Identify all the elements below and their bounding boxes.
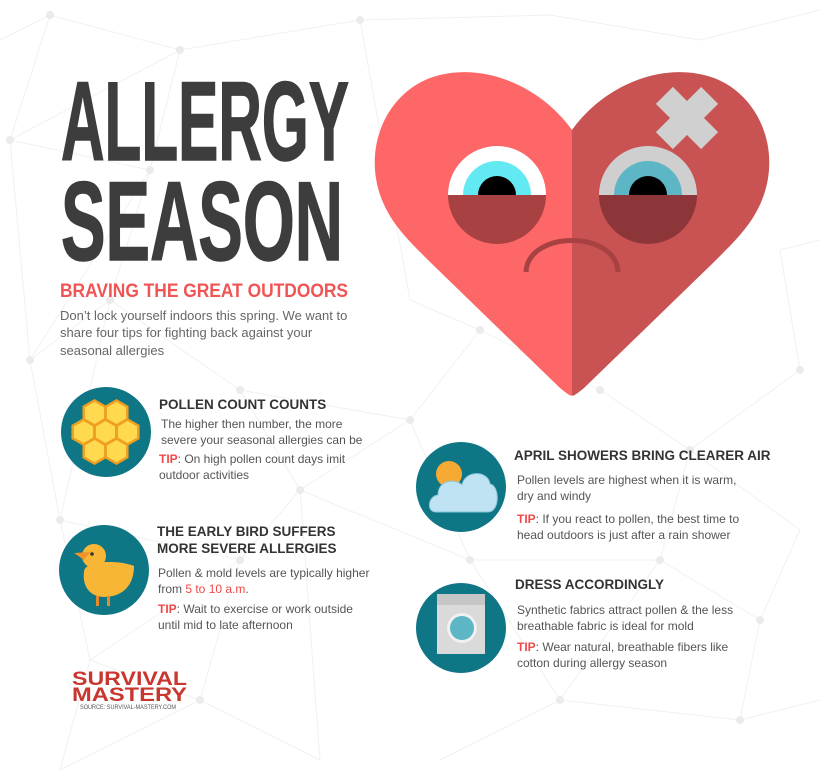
panel: early bird: until mid to late afternoon bbox=[158, 618, 293, 632]
panel: dress accordingly: DRESS ACCORDINGLY bbox=[515, 577, 664, 592]
icon: honeycomb bbox=[61, 387, 151, 477]
intro text: seasonal allergies bbox=[60, 343, 165, 358]
logo bbox=[72, 669, 187, 711]
panel: april showers: dry and windy bbox=[517, 489, 591, 503]
panel: pollen count: TIP: On high pollen count days imit bbox=[159, 452, 346, 466]
title bbox=[61, 59, 349, 284]
panel: pollen count: severe your seasonal allergies can be bbox=[161, 433, 363, 447]
panel: early bird: MORE SEVERE ALLERGIES bbox=[157, 541, 337, 556]
intro text bbox=[60, 308, 347, 358]
icon: washing machine bbox=[416, 583, 506, 673]
panel: early bird: THE EARLY BIRD SUFFERS bbox=[157, 524, 336, 539]
title: ALLERGY bbox=[61, 59, 349, 184]
left eye bbox=[448, 146, 546, 244]
panel: pollen count bbox=[159, 397, 363, 482]
panel: april showers: head outdoors is just after a rain shower bbox=[517, 528, 730, 542]
panel: pollen count: outdoor activities bbox=[159, 468, 249, 482]
panel: dress accordingly bbox=[515, 577, 733, 670]
panel: april showers: Pollen levels are highest when it is warm, bbox=[517, 473, 736, 487]
panel: dress accordingly: TIP: Wear natural, breathable fibers like bbox=[517, 640, 729, 654]
panel: dress accordingly: Synthetic fabrics attract pollen & the less bbox=[517, 603, 733, 617]
panel: early bird: TIP: Wait to exercise or work outside bbox=[158, 602, 353, 616]
logo: MASTERY bbox=[72, 685, 187, 706]
icon: duck bbox=[59, 525, 149, 615]
logo: SOURCE: SURVIVAL-MASTERY.COM bbox=[80, 705, 176, 711]
panel: april showers: TIP: If you react to pollen, the best time to bbox=[517, 512, 739, 526]
panel: early bird: from 5 to 10 a.m. bbox=[158, 582, 249, 596]
mouth bbox=[526, 240, 618, 272]
subtitle: BRAVING THE GREAT OUTDOORS bbox=[60, 281, 348, 302]
panel: april showers: APRIL SHOWERS BRING CLEARER AIR bbox=[514, 448, 771, 463]
panel: dress accordingly: cotton during allergy season bbox=[517, 656, 667, 670]
title: SEASON bbox=[61, 159, 343, 284]
panel: pollen count: The higher then number, the more bbox=[161, 417, 343, 431]
icon: cloud bbox=[416, 442, 506, 532]
intro text: share four tips for fighting back against your bbox=[60, 325, 313, 340]
bandage bbox=[656, 87, 718, 149]
right eye bbox=[599, 146, 697, 244]
panel: early bird: Pollen & mold levels are typically higher bbox=[158, 566, 369, 580]
panel: dress accordingly: breathable fabric is ideal for mold bbox=[517, 619, 694, 633]
heart bbox=[375, 72, 769, 396]
logo: SURVIVAL bbox=[72, 669, 187, 690]
intro text: Don’t lock yourself indoors this spring. We want to bbox=[60, 308, 347, 323]
panel: pollen count: POLLEN COUNT COUNTS bbox=[159, 397, 326, 412]
panel: early bird bbox=[157, 524, 369, 632]
panel: april showers bbox=[514, 448, 771, 542]
